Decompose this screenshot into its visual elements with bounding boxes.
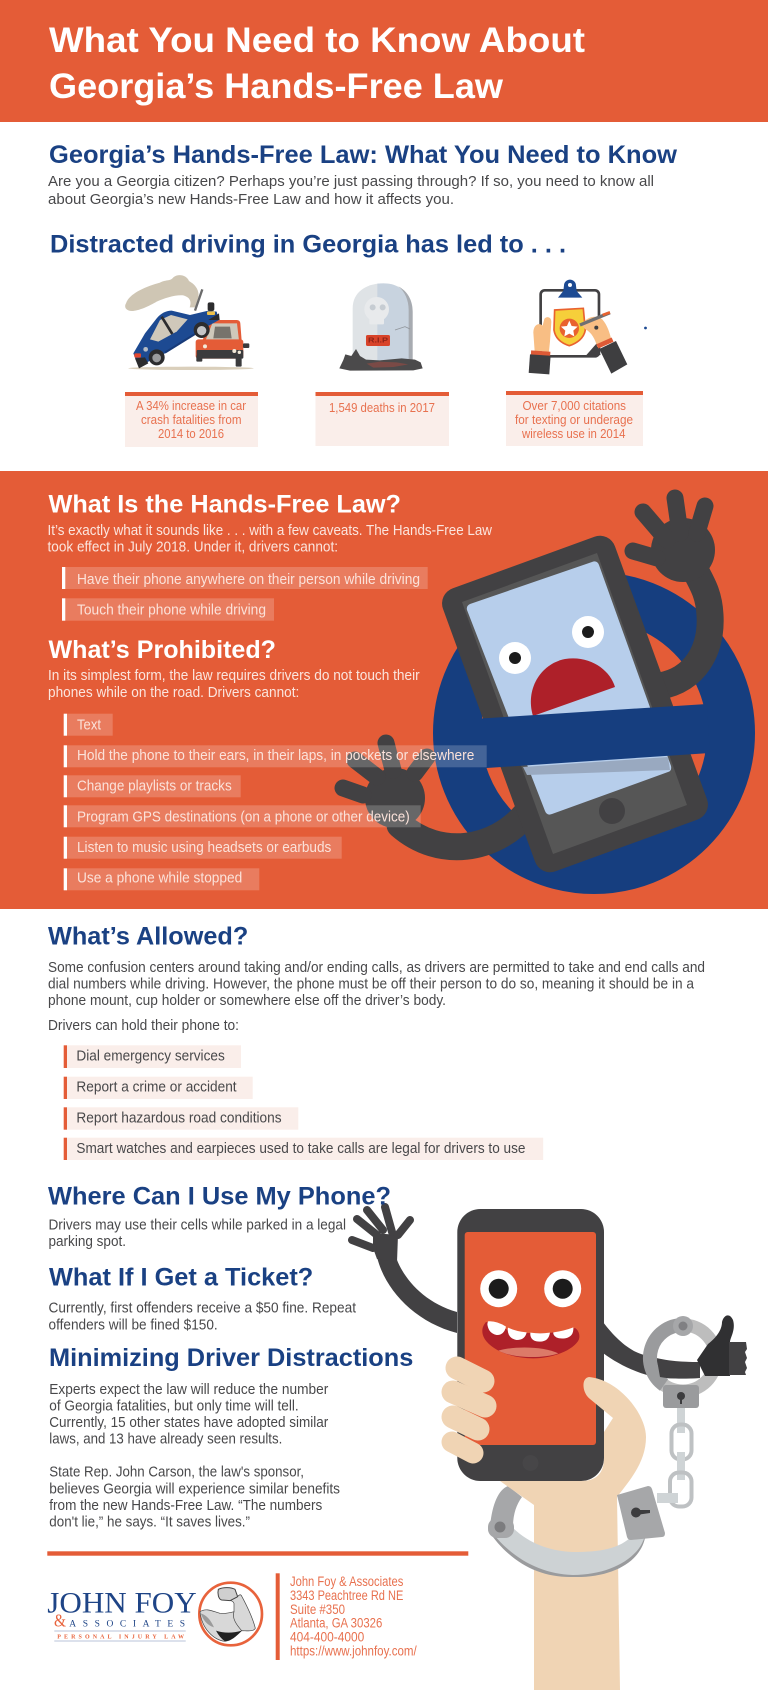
text block: what's allowed: phone mount, cup holder or somewhere else off the driver’s body. [48, 993, 446, 1009]
list: prohibited actions: Hold the phone to their ears, in their laps, in pockets or elsewhere [77, 748, 474, 764]
list: drivers cannot: Have their phone anywhere on their person while driving [77, 572, 420, 588]
panel: orange law section [0, 471, 768, 909]
text block: where: parking spot. [48, 1234, 126, 1250]
icon: tombstone [339, 283, 423, 371]
text block: contact details: Suite #350 [290, 1602, 345, 1617]
list: drivers can hold their phone [64, 1045, 543, 1160]
heading: intro: Georgia’s Hands-Free Law: What You Need to Know [49, 141, 678, 169]
text block: where [48, 1217, 346, 1250]
text block: minimizing: Currently, 15 other states have adopted similar [49, 1415, 328, 1431]
list: drivers can hold their phone: Dial emergency services [76, 1049, 225, 1065]
list: prohibited actions: Text [77, 717, 101, 733]
callout: crash fatalities: 2014 to 2016 [158, 427, 224, 441]
text block: minimizing [49, 1382, 340, 1531]
divider bar: contact [276, 1573, 280, 1660]
text block: where: Drivers may use their cells while parked in a legal [48, 1217, 346, 1233]
illustration: scared phone in prohibition sign [343, 498, 731, 877]
phone left arm and waving hand [352, 1207, 457, 1333]
text block: contact details: Atlanta, GA 30326 [290, 1616, 382, 1631]
list: drivers cannot [62, 567, 428, 621]
text block: contact details: 404-400-4000 [290, 1630, 364, 1645]
callout: citations: Over 7,000 citations [522, 399, 626, 413]
logo: John Foy and Associates: JOHN FOY [47, 1587, 197, 1620]
decorative dot [644, 327, 647, 329]
heading: minimizing distractions: Minimizing Driver Distractions [49, 1344, 413, 1372]
callout: deaths [316, 392, 449, 446]
heading: prohibited: What’s Prohibited? [48, 636, 276, 664]
text block: contact details: https://www.johnfoy.com/ [290, 1644, 417, 1659]
back of wrist cuff [490, 1486, 522, 1527]
text block: what's allowed: Drivers can hold their phone to: [48, 1018, 239, 1034]
panel: title banner: What You Need to Know About [49, 21, 585, 60]
text block: intro: Are you a Georgia citizen? Perhaps you’re just passing through? If so, you need to know all [48, 174, 654, 190]
list: drivers cannot: Touch their phone while driving [77, 603, 266, 619]
text block: contact details: John Foy & Associates [290, 1574, 403, 1589]
text block: prohibited: phones while on the road. Drivers cannot: [48, 685, 299, 701]
panel: title banner: Georgia’s Hands-Free Law [49, 67, 504, 106]
text block: contact details: 3343 Peachtree Rd NE [290, 1588, 403, 1603]
callout: crash fatalities [125, 392, 258, 447]
text block: what's allowed: Some confusion centers around taking and/or ending calls, as drivers are permitted to take and end calls and [48, 960, 705, 976]
text block: what is the law [48, 523, 492, 556]
text block: what's allowed: dial numbers while driving. However, the phone must be off their person to do so, meaning it should be in a [48, 977, 695, 993]
callout: crash fatalities: A 34% increase in car [136, 399, 246, 413]
icon: flexed bicep badge [199, 1583, 262, 1645]
chain [657, 1408, 692, 1506]
fingers [452, 1368, 485, 1453]
text block: minimizing: believes Georgia will experience similar benefits [49, 1482, 340, 1498]
callout: citations [506, 391, 643, 446]
callout: citations: for texting or underage [515, 413, 633, 427]
illustration: handcuffed phone [352, 1207, 747, 1690]
list: prohibited actions: Program GPS destinations (on a phone or other device) [77, 809, 410, 825]
heading: what's allowed: What’s Allowed? [48, 922, 248, 950]
list: prohibited actions [64, 714, 487, 890]
text block: what is the law: took effect in July 2018. Under it, drivers cannot: [48, 540, 338, 556]
upper cuff ring [650, 1316, 716, 1408]
text block: ticket: offenders will be fined $150. [48, 1317, 218, 1333]
list: drivers can hold their phone: Report hazardous road conditions [76, 1110, 282, 1126]
phone body [457, 1209, 604, 1481]
text block: prohibited: In its simplest form, the law requires drivers do not touch their [48, 668, 420, 684]
logo: John Foy and Associates [47, 1583, 262, 1645]
heading: where can I use my phone: Where Can I Use My Phone? [48, 1182, 391, 1210]
phone right arm [603, 1322, 700, 1379]
phone face [480, 1270, 581, 1358]
footer rule [47, 1551, 468, 1556]
heading: distracted driving: Distracted driving in Georgia has led to . . . [50, 230, 566, 258]
text block: ticket: Currently, first offenders receive a $50 fine. Repeat [48, 1301, 356, 1317]
hand and forearm holding phone [500, 1377, 646, 1690]
text block: minimizing: Experts expect the law will reduce the number [49, 1382, 328, 1398]
icon: car crash [125, 275, 254, 370]
heading: what is the law: What Is the Hands-Free Law? [48, 491, 401, 519]
text block: intro: about Georgia’s new Hands-Free Law and how it affects you. [48, 192, 454, 208]
panel: title banner [0, 0, 768, 122]
list: drivers can hold their phone: Report a crime or accident [76, 1080, 237, 1096]
text block: what's allowed [48, 960, 705, 1034]
logo: John Foy and Associates: & [54, 1611, 66, 1631]
callout: deaths: 1,549 deaths in 2017 [329, 401, 435, 415]
list: drivers can hold their phone: Smart watches and earpieces used to take calls are legal for drivers to use [76, 1141, 526, 1157]
icon: citation clipboard [529, 280, 627, 374]
logo: John Foy and Associates: ASSOCIATES [69, 1620, 185, 1630]
logo: John Foy and Associates: PERSONAL INJURY LAW [57, 1634, 184, 1640]
wrist cuff [488, 1486, 665, 1577]
heading: ticket: What If I Get a Ticket? [49, 1264, 313, 1292]
text block: ticket [48, 1301, 356, 1333]
text block: what is the law: It’s exactly what it sounds like . . . with a few caveats. The Hands-Free Law [48, 523, 492, 539]
list: prohibited actions: Use a phone while stopped [77, 871, 242, 887]
text block: minimizing: don't lie,” he says. “It saves lives.” [49, 1515, 250, 1531]
list: prohibited actions: Change playlists or tracks [77, 779, 232, 795]
text block: minimizing: of Georgia fatalities, but only time will tell. [49, 1398, 299, 1414]
callout: citations: wireless use in 2014 [521, 427, 626, 441]
text block: prohibited [48, 668, 420, 701]
thumbs-up hand [697, 1315, 747, 1376]
text block: contact details [290, 1574, 417, 1659]
text block: minimizing: State Rep. John Carson, the law's sponsor, [49, 1465, 304, 1481]
text block: minimizing: laws, and 13 have already seen results. [49, 1432, 282, 1448]
text block: minimizing: from the new Hands-Free Law. “The numbers [49, 1498, 322, 1514]
icon: tombstone: R.I.P [368, 338, 388, 345]
text block: intro [48, 174, 654, 208]
callout: crash fatalities: crash fatalities from [141, 413, 242, 427]
list: prohibited actions: Listen to music using headsets or earbuds [77, 840, 331, 856]
